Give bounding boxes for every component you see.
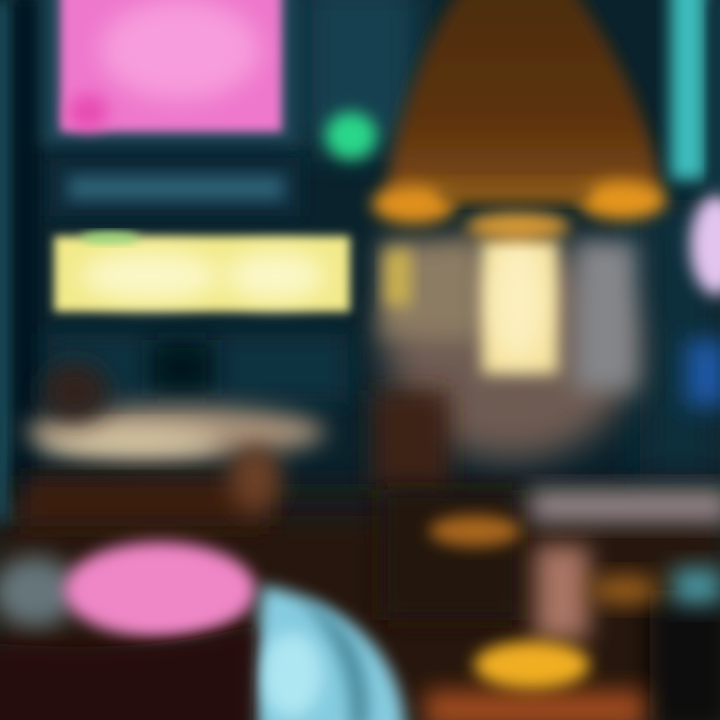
candle glow — [425, 641, 645, 720]
lamp glass — [380, 240, 637, 460]
lamp stand — [372, 390, 521, 620]
blue light — [686, 340, 720, 406]
cup body — [0, 625, 254, 720]
saucer light patch — [262, 633, 322, 717]
cyan column — [670, 0, 720, 190]
left wall strip — [0, 0, 38, 520]
foreground cup — [0, 542, 405, 720]
right table — [530, 490, 720, 720]
yellow sign bar — [54, 232, 350, 312]
pendant lamp dome — [385, 0, 662, 195]
teal menu strip — [50, 158, 300, 216]
cup pink rim — [64, 542, 256, 638]
counter top — [25, 362, 325, 458]
green light — [325, 112, 377, 160]
saucer inner shadow — [300, 600, 368, 720]
pink sign — [42, 0, 298, 146]
cup left rim — [0, 556, 77, 628]
lamp orange highlights — [372, 180, 666, 240]
counter base — [20, 444, 281, 526]
dark blue window — [48, 334, 348, 402]
purple light — [690, 195, 720, 295]
saucer ring — [255, 585, 405, 720]
